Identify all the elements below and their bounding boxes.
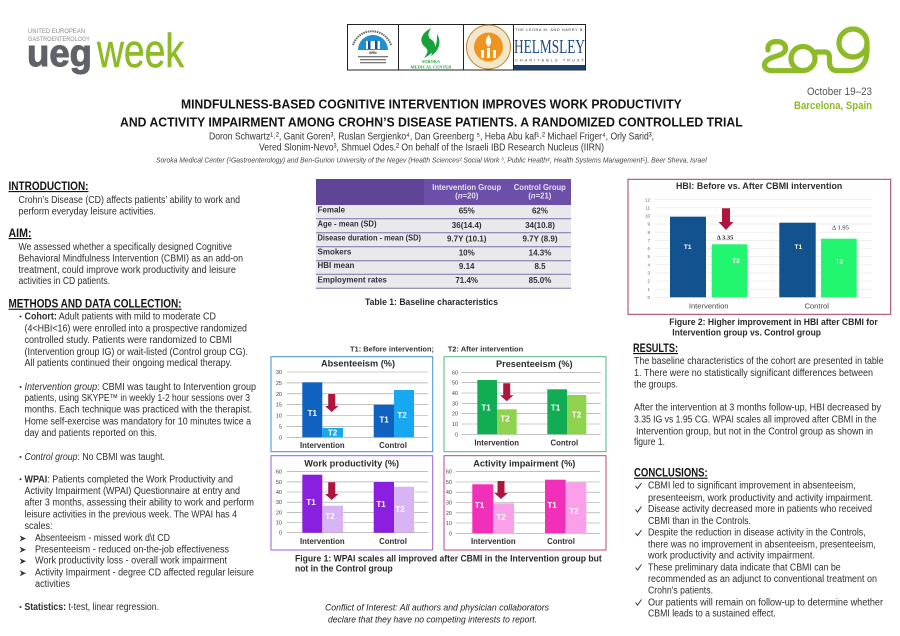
logo: Helmsley Charitable Trust: CHARITABLE TRUST <box>515 58 585 62</box>
panel: aim <box>8 228 243 287</box>
chart: activity impairment: Intervention <box>471 537 516 546</box>
date: October 19–23 <box>807 86 872 98</box>
table: baseline characteristics: 65% <box>459 206 475 215</box>
chart: activity impairment: Activity impairment (%) <box>473 459 575 469</box>
chart: absenteeism: Absenteeism (%) <box>321 359 395 369</box>
table: baseline characteristics: 14.3% <box>529 248 551 258</box>
chart: presenteeism: T1 <box>551 404 561 412</box>
chart: activity impairment <box>444 456 606 550</box>
chart: absenteeism: 10 <box>276 414 282 420</box>
figure 1 caption: Figure 1: WPAI scales all improved after CBMI in the Intervention group but <box>295 554 602 564</box>
text: cohort: All patients continued their ongoing medical therapy. <box>24 358 232 369</box>
table: baseline characteristics <box>316 179 571 288</box>
chart: activity impairment: 60 <box>446 470 452 476</box>
arrow: decrease <box>325 482 338 500</box>
heading: methods: METHODS AND DATA COLLECTION: <box>8 299 182 311</box>
logo strip: partner institutions <box>348 24 586 70</box>
chart: HBI before vs after: 1 <box>647 287 650 292</box>
panel: methods and data collection <box>8 299 256 613</box>
figure 1 caption: not in the Control group <box>295 564 393 574</box>
figure 1 caption <box>295 554 602 574</box>
title: MINDFULNESS-BASED COGNITIVE INTERVENTION IMPROVES WORK PRODUCTIVITY <box>181 97 682 112</box>
text: intervention group <box>20 382 256 439</box>
table: baseline characteristics: Smokers <box>318 247 352 256</box>
chart: activity impairment: 20 <box>446 511 452 517</box>
chart: HBI before vs after: 4 <box>647 262 650 267</box>
text: intervention group: Intervention group: CBMI was taught to Intervention group <box>24 382 256 393</box>
chart: HBI before vs after <box>628 179 891 314</box>
title: AND ACTIVITY IMPAIRMENT AMONG CROHN’S DISEASE PATIENTS. A RANDOMIZED CONTROLLED TRIAL <box>120 114 743 129</box>
chart: presenteeism: T2 <box>572 410 582 420</box>
chart: activity impairment: T1 <box>547 501 557 510</box>
chart: work productivity: 40 <box>276 490 282 496</box>
text: introduction body: Crohn’s Disease (CD) affects patients’ ability to work and <box>18 195 240 206</box>
list: WPAI scales: Activity Impairment - degree CD affected regular leisure <box>35 568 254 579</box>
list: conclusions: CBMI led to significant improvement in absenteeism, <box>648 481 856 492</box>
chart: HBI before vs after: Control <box>804 301 829 310</box>
chart: work productivity: Intervention <box>300 537 345 546</box>
list: conclusions: These preliminary data indicate that CBMI can be <box>648 562 841 573</box>
chart: activity impairment: T1 <box>475 501 485 510</box>
list: WPAI scales: activities <box>35 579 70 590</box>
table: baseline characteristics: 10% <box>459 248 475 258</box>
title <box>120 97 743 129</box>
logo: UEG week: ueg <box>27 33 92 75</box>
text: introduction body <box>18 195 240 218</box>
numerals 2019 <box>764 29 867 71</box>
chart: work productivity: 50 <box>276 480 282 486</box>
chart: activity impairment: 50 <box>446 480 452 486</box>
chart: presenteeism: 60 <box>452 370 458 376</box>
heading: results: RESULTS: <box>633 343 678 355</box>
text: intervention group: day and patients reported on this. <box>24 428 157 439</box>
logo: Helmsley Charitable Trust: HELMSLEY <box>514 36 585 58</box>
arrow: decrease <box>718 208 734 230</box>
logo: UEG week: UNITED EUROPEAN <box>28 28 85 35</box>
chart: absenteeism: 15 <box>276 403 282 409</box>
table: baseline characteristics: 9.14 <box>459 262 475 271</box>
authors: Doron Schwartz¹˒², Ganit Goren³, Ruslan Sergienko⁴, Dan Greenberg ⁵, Heba Abu kaf¹˒² Michael Friger⁴, Orly Sarid³, <box>209 132 654 143</box>
chart: HBI before vs after: T2 <box>732 258 740 265</box>
table: baseline characteristics: Intervention Group <box>432 183 501 192</box>
conflict of interest note <box>325 602 549 624</box>
chart: work productivity: 20 <box>276 510 282 516</box>
chart: absenteeism: T1 <box>308 409 318 418</box>
table: baseline characteristics: Female <box>318 205 346 214</box>
text: aim body <box>18 242 243 287</box>
text: results body: 1. There were no statistically significant differences between <box>634 368 873 379</box>
table: baseline characteristics: 9.7Y (8.9) <box>523 234 558 244</box>
chart: presenteeism: 0 <box>455 432 458 438</box>
table: baseline characteristics: Employment rates <box>318 275 387 284</box>
chart: activity impairment: T2 <box>569 507 579 516</box>
text: cohort: Cohort: Adult patients with mild to moderate CD <box>24 312 216 323</box>
list: conclusions: presenteeism, work productivity and activity impairment. <box>648 493 873 504</box>
text: WPAI: scales: <box>24 521 52 532</box>
chart: absenteeism: T2 <box>397 411 407 420</box>
chart: presenteeism: 50 <box>452 381 458 387</box>
text: aim body: treatment, could improve work productivity and leisure <box>18 265 236 276</box>
list: conclusions: Our patients will remain on follow-up to determine whether <box>648 597 884 608</box>
table: baseline characteristics: HBI mean <box>318 261 355 270</box>
list: conclusions: Crohn's patients. <box>648 585 713 596</box>
chart: HBI before vs after: 6 <box>647 246 650 251</box>
chart: work productivity: 0 <box>279 531 282 537</box>
chart: HBI before vs after: 3 <box>647 270 650 276</box>
chart: HBI before vs after: Intervention <box>689 301 729 310</box>
list: WPAI scales: Presenteeism - reduced on-the-job effectiveness <box>35 544 229 555</box>
conflict of interest note: Conflict of Interest: All authors and physician collaborators <box>325 602 549 612</box>
logo: IIRN <box>353 31 391 63</box>
figure 2 caption: Figure 2: Higher improvement in HBI after CBMI for <box>669 317 878 327</box>
logo: Soroka Medical Center: SOROKA <box>422 59 440 64</box>
text: WPAI: Activity Impairment (WPAI) Questionnaire at entry and <box>24 486 240 497</box>
place: Barcelona, Spain <box>794 100 872 112</box>
text: aim body: activities in CD patients. <box>18 276 110 287</box>
logo: IIRN: IIRN <box>369 51 377 55</box>
table: baseline characteristics: Control Group <box>514 183 566 192</box>
chart: absenteeism: T2 <box>328 428 338 438</box>
arrow: decrease <box>325 394 338 412</box>
affiliations: Soroka Medical Center (¹Gastroenterology) and Ben-Gurion University of the Negev (Health Sciences² Social Work ³, Public Health⁴, Health Systems Management⁵), Beer Sheva, Israel <box>156 155 707 164</box>
panel: conclusions <box>634 468 884 620</box>
chart: HBI before vs after: 8 <box>647 230 650 235</box>
legend: T1 and T2: T2: After intervention <box>448 345 524 354</box>
text: results body <box>634 356 884 448</box>
chart: work productivity: 60 <box>276 470 282 476</box>
text: results body: Intervention group, but not in the Control group as shown in <box>636 426 873 437</box>
logo: Soroka Medical Center <box>410 28 452 70</box>
chart: HBI before vs after: T2 <box>836 259 843 266</box>
text: statistics: Statistics: t-test, linear regression. <box>24 602 159 613</box>
list: conclusions: Disease activity decreased more in patients who received <box>648 504 872 515</box>
logo: Helmsley Charitable Trust: THE LEONA M. AND HARRY B. <box>515 28 584 32</box>
table: baseline characteristics: 36(14.4) <box>452 221 482 230</box>
chart: absenteeism: Intervention <box>300 441 345 450</box>
heading: introduction: INTRODUCTION: <box>8 181 88 193</box>
chart: absenteeism: T1 <box>379 416 389 424</box>
list: conclusions: there was no improvement in absenteeism, presenteeism, <box>648 539 876 550</box>
figure 2 caption <box>669 317 878 338</box>
panel: introduction <box>8 181 240 218</box>
chart: activity impairment: 10 <box>446 521 452 527</box>
table: baseline characteristics: 34(10.8) <box>525 221 555 230</box>
chart: absenteeism: 30 <box>276 370 282 376</box>
logo: UEG week <box>27 24 184 77</box>
chart: presenteeism: 30 <box>452 401 458 407</box>
panel: results <box>633 343 884 448</box>
table: baseline characteristics: (n=21) <box>528 192 552 201</box>
text: results body: figure 1. <box>634 437 665 448</box>
text: cohort: (Intervention group IG) or wait-listed (Control group CG). <box>24 347 248 358</box>
chart: absenteeism: 20 <box>276 392 282 398</box>
list: conclusions: CBMI leads to a sustained effect. <box>648 609 776 620</box>
chart: activity impairment: Control <box>547 537 575 546</box>
chart: absenteeism: 5 <box>279 424 282 430</box>
legend: T1 and T2: T1: Before intervention; <box>350 345 434 354</box>
text: intervention group: months. Each technique was practiced with the therapist. <box>24 405 252 416</box>
text: results body: the groups. <box>634 380 678 391</box>
chart: work productivity: Work productivity (%) <box>304 459 399 469</box>
chart: HBI before vs after: 11 <box>645 205 650 210</box>
text: WPAI: leisure activities in the previous week. The WPAI has 4 <box>24 510 237 521</box>
chart: HBI before vs after: 12 <box>645 197 650 202</box>
chart: HBI before vs after: Δ 3.35 <box>717 234 734 241</box>
text: cohort: controlled study. Patients were randomized to CBMI <box>24 335 232 346</box>
chart: HBI before vs after: 9 <box>647 222 650 227</box>
list: WPAI scales <box>20 533 254 590</box>
text: WPAI: WPAI: Patients completed the Work Productivity and <box>24 474 233 485</box>
authors <box>209 132 654 154</box>
chart: activity impairment: 40 <box>446 490 452 496</box>
logo: 2019 with date and place <box>764 29 872 112</box>
chart: presenteeism: Presenteeism (%) <box>496 359 573 369</box>
text: intervention group: patients, using SKYPE™ in weekly 1-2 hour sessions over 3 <box>24 393 250 404</box>
text: WPAI <box>20 474 254 532</box>
conflict of interest note: declare that they have no competing interests to report. <box>328 614 537 624</box>
text: cohort: (4<HBI<16) were enrolled into a prospective randomized <box>24 324 247 335</box>
text: WPAI: after 3 months, assessing their ability to work and perform <box>24 498 254 509</box>
table: baseline characteristics: 9.7Y (10.1) <box>447 234 487 244</box>
chart: work productivity: T1 <box>306 498 316 507</box>
text: control group: Control group: No CBMI was taught. <box>24 452 165 463</box>
chart: absenteeism: Control <box>379 441 407 450</box>
chart: presenteeism: Intervention <box>474 439 519 448</box>
chart: HBI before vs after: HBI: Before vs. After CBMI intervention <box>676 181 842 191</box>
chart: activity impairment: T2 <box>496 513 506 522</box>
chart: HBI before vs after: 5 <box>647 254 650 259</box>
chart: activity impairment: 30 <box>446 500 452 506</box>
chart: activity impairment: 0 <box>449 531 452 537</box>
list: WPAI scales: Work productivity loss - overall work impairment <box>35 556 227 567</box>
chart: HBI before vs after: Δ 1.95 <box>832 224 849 231</box>
logo: UEG week: GASTROENTEROLOGY <box>28 36 90 43</box>
chart: presenteeism: T2 <box>500 414 510 424</box>
table: baseline characteristics: 85.0% <box>529 276 551 285</box>
logo: Soroka Medical Center: MEDICAL CENTER <box>410 64 452 70</box>
chart: work productivity <box>271 456 433 550</box>
list: conclusions: CBMI than in the Controls. <box>648 516 751 527</box>
logo: Helmsley Charitable Trust <box>514 28 585 70</box>
arrow: decrease <box>494 481 508 499</box>
logo: UEG week: week <box>96 24 184 77</box>
chart: absenteeism <box>271 357 433 452</box>
table: baseline characteristics: 62% <box>532 206 548 215</box>
table: baseline characteristics: 71.4% <box>455 276 478 285</box>
heading: conclusions: CONCLUSIONS: <box>634 468 708 480</box>
authors: Vered Slonim-Nevo³, Shmuel Odes.² On behalf of the Israeli IBD Research Nucleus (IIRN) <box>259 143 604 154</box>
list: conclusions <box>636 481 884 620</box>
chart: HBI before vs after: T1 <box>795 244 802 251</box>
chart: work productivity: T2 <box>325 512 335 521</box>
chart: HBI before vs after: 7 <box>647 238 650 243</box>
list: conclusions: Despite the reduction in disease activity in the Controls, <box>648 528 866 539</box>
text: cohort <box>20 312 248 369</box>
table: baseline characteristics: Age - mean (SD) <box>318 220 377 229</box>
text: aim body: Behavioral Mindfulness Intervention (CBMI) as an add-on <box>18 254 243 265</box>
arrow: decrease <box>500 383 514 401</box>
chart: work productivity: Control <box>379 537 407 546</box>
chart: work productivity: 10 <box>276 520 282 526</box>
chart: presenteeism: 10 <box>452 422 458 428</box>
chart: work productivity: T1 <box>376 500 386 509</box>
chart: work productivity: T2 <box>395 505 405 514</box>
chart: absenteeism: 25 <box>276 381 282 387</box>
list: conclusions: recommended as an adjunct to conventional treatment on <box>648 574 877 585</box>
chart: HBI before vs after: T1 <box>684 244 692 251</box>
list: WPAI scales: Absenteeism - missed work d\t CD <box>35 533 170 544</box>
chart: HBI before vs after: 10 <box>645 214 650 219</box>
chart: presenteeism: Control <box>550 439 578 448</box>
table: baseline characteristics: Disease duration - mean (SD) <box>318 234 421 242</box>
chart: HBI before vs after: 0 <box>647 295 650 300</box>
table caption: Table 1: Baseline characteristics <box>365 297 498 307</box>
chart: presenteeism: T1 <box>481 404 491 412</box>
heading: aim: AIM: <box>8 228 32 240</box>
chart: HBI before vs after: 2 <box>647 279 650 284</box>
chart: absenteeism: 0 <box>279 435 282 441</box>
text: intervention group: Home self-exercise was mandatory for 10 minutes twice a <box>24 416 251 427</box>
text: introduction body: perform everyday leisure activities. <box>18 206 156 218</box>
chart: presenteeism: 40 <box>452 391 458 397</box>
chart: work productivity: 30 <box>276 500 282 506</box>
chart: presenteeism <box>444 357 606 452</box>
table: baseline characteristics: (n=20) <box>455 192 479 201</box>
legend: T1 and T2 <box>350 345 524 354</box>
text: aim body: We assessed whether a specifically designed Cognitive <box>18 242 232 253</box>
figure 2 caption: Intervention group vs. Control group <box>672 328 821 338</box>
logo: Ben-Gurion University <box>466 25 510 69</box>
table: baseline characteristics: 8.5 <box>534 262 546 271</box>
list: conclusions: work productivity and activity impairment. <box>647 551 815 562</box>
chart: presenteeism: 20 <box>452 412 458 418</box>
